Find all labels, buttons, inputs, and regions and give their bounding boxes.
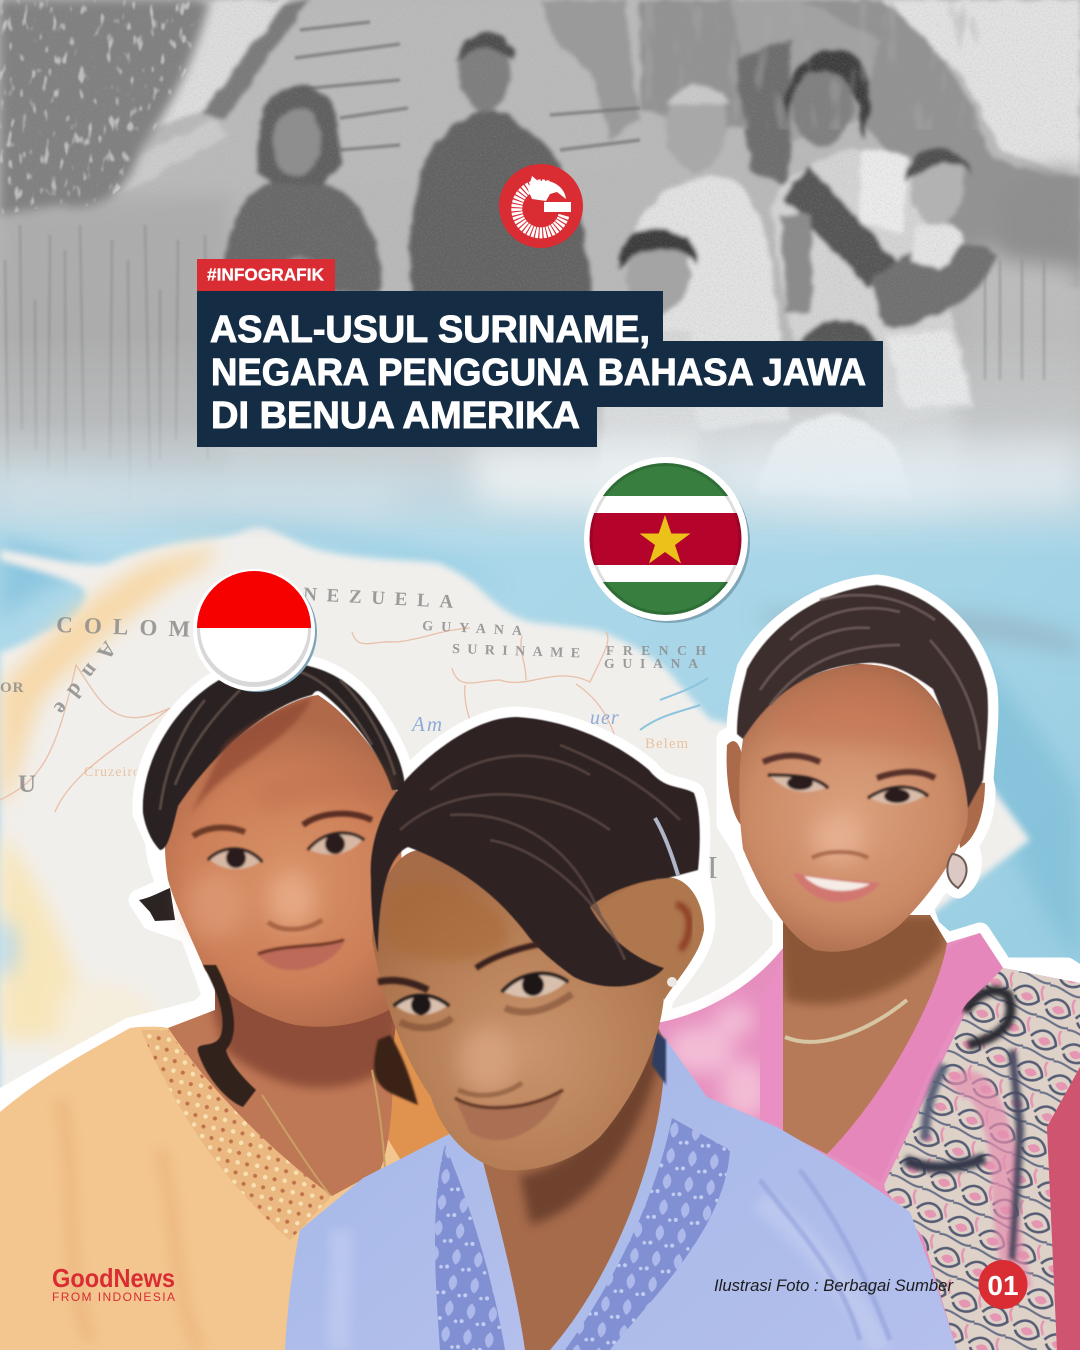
hair [143, 663, 405, 850]
orange dress [0, 1010, 480, 1350]
flag star [640, 515, 690, 564]
GoodNews from Indonesia logo [52, 1263, 175, 1304]
facial features [378, 944, 572, 1140]
land mass of South America [0, 527, 1030, 1180]
facial features [193, 814, 372, 970]
pink collar [827, 933, 1003, 1182]
neck and chest [168, 985, 400, 1196]
GoodNews from Indonesia logo: GoodNews [52, 1263, 175, 1293]
rivers [640, 678, 708, 730]
child in middle [626, 246, 694, 316]
mist between the photo and the map [0, 440, 1080, 515]
map labels: Cruzeiro [84, 765, 141, 780]
blue kebaya right panel [550, 1037, 957, 1350]
face [372, 850, 664, 1170]
stray strand [139, 888, 175, 921]
sky [880, 0, 1080, 177]
title background [197, 291, 883, 447]
face [739, 664, 968, 952]
photo credit: Ilustrasi Foto : Berbagai Sumber [714, 1276, 954, 1295]
hair [371, 717, 700, 987]
white cut-out outlines of the three girls [0, 585, 1080, 1350]
logo badge [499, 164, 583, 248]
earring [667, 977, 677, 987]
map labels: U [18, 771, 38, 798]
map labels [0, 584, 718, 885]
tree [0, 0, 210, 215]
flag ring [584, 457, 748, 621]
temple tone and ear [595, 877, 704, 1000]
girl in the centre [285, 717, 957, 1350]
hair strands [760, 595, 980, 750]
photo film grain [147, 0, 1080, 439]
facial features [763, 756, 935, 902]
collar shadow [652, 1030, 666, 1085]
map labels: COLOM [56, 612, 191, 642]
nose highlight [812, 814, 864, 862]
ornament ring [517, 185, 564, 233]
eagle head [528, 176, 566, 201]
letter G bar [544, 202, 571, 212]
background archival photo of a Javanese family [0, 0, 1080, 514]
hair highlights [160, 672, 395, 810]
category tag [197, 259, 335, 291]
hair [737, 585, 988, 808]
family members [224, 32, 998, 500]
house planks [290, 22, 640, 150]
dress folds [60, 1100, 200, 1350]
earring [947, 854, 967, 888]
ears [727, 741, 748, 826]
necklace [262, 1070, 385, 1195]
flag shadow [197, 572, 317, 692]
map labels: Ande [42, 637, 122, 730]
title [197, 291, 883, 447]
map labels: GUYANA [422, 619, 523, 639]
photo foliage specks [0, 0, 194, 214]
GoodNews from Indonesia logo: FROM INDONESIA [52, 1290, 175, 1304]
title: ASAL-USUL SURINAME, [210, 309, 650, 351]
nose highlight [459, 1026, 515, 1094]
category tag: #INFOGRAFIK [207, 264, 324, 284]
batik shawl [883, 968, 1080, 1350]
grass and fence [4, 225, 1046, 454]
neck and chest [480, 1010, 664, 1350]
map labels: SURINAME [452, 642, 580, 661]
flag: Indonesia [193, 569, 317, 692]
right woman [770, 150, 975, 430]
title: NEGARA PENGGUNA BAHASA JAWA [211, 352, 866, 394]
necklace [785, 1000, 907, 1042]
blue kebaya left panel [285, 1128, 525, 1350]
map labels: uer [590, 707, 620, 729]
photo roof foliage [640, 0, 980, 130]
thatch roof [640, 0, 1080, 290]
baby [912, 150, 964, 226]
neck and chest [783, 915, 947, 1154]
face [165, 695, 405, 1027]
red sleeve [1047, 1067, 1080, 1350]
background map [0, 300, 1080, 1350]
inner ear [676, 905, 689, 950]
dress sheen [339, 1200, 880, 1350]
page number: 01 [987, 1270, 1019, 1301]
old person [634, 176, 790, 430]
front child [806, 320, 870, 404]
hair strands [400, 745, 680, 960]
curly locks [198, 965, 256, 1107]
girl on the left [0, 663, 480, 1350]
forehead tone [385, 880, 508, 960]
map labels: GUIANA [604, 656, 698, 671]
map borders [0, 628, 618, 812]
collar embroidery [435, 1145, 505, 1350]
map labels: I [707, 849, 718, 885]
lace trim [141, 1030, 332, 1240]
house wall with planks [90, 0, 640, 205]
page number [978, 1260, 1028, 1309]
facial shading [185, 783, 385, 939]
title: DI BENUA AMERIKA [211, 395, 580, 437]
batik accents [905, 991, 1020, 1290]
forehead tone [770, 675, 945, 755]
map labels: Am [410, 712, 444, 736]
tree and grass masses [6, 158, 1080, 460]
map labels: OR [0, 680, 24, 696]
girl on the right [657, 585, 1080, 1350]
hair clip [655, 818, 678, 875]
flag stripes [197, 571, 311, 628]
flag shadow [588, 461, 750, 623]
right shoulder cloth [370, 1010, 470, 1175]
map labels: FRENCH [606, 643, 706, 658]
dress leaf print [760, 1170, 890, 1340]
map labels: NEZUELA [303, 584, 454, 613]
left woman [224, 176, 382, 292]
floral sleeve [666, 1004, 769, 1120]
reddish hair strands on forehead [190, 698, 312, 815]
hanging foliage by the house [540, 0, 640, 140]
flag: Suriname [584, 457, 750, 623]
flag ring [193, 569, 315, 691]
map labels: Belem [645, 736, 689, 752]
pink dress [657, 933, 1080, 1350]
centre man [409, 110, 592, 300]
